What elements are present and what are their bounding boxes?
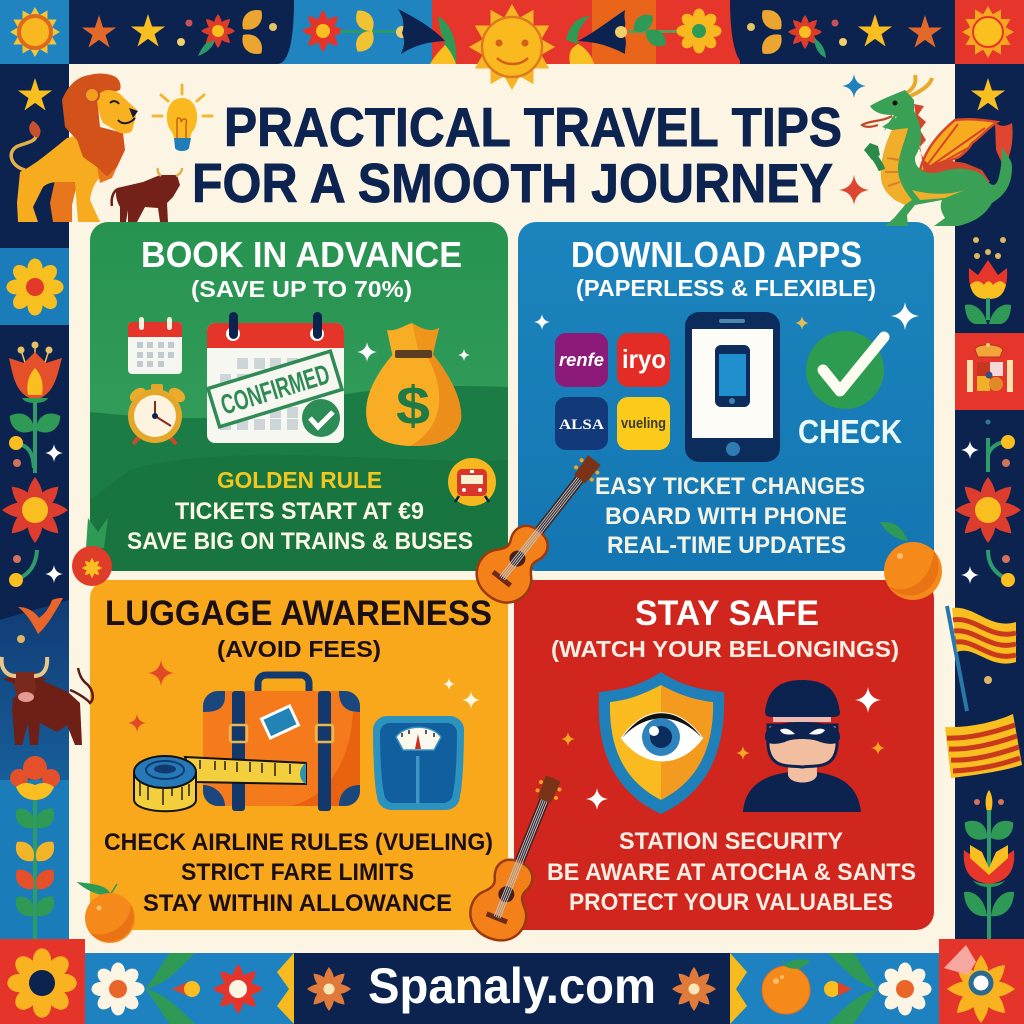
icon: train badge xyxy=(448,458,496,506)
tip text: ticket changes: EASY TICKET CHANGES xyxy=(595,473,865,500)
icon: orange fruit in band xyxy=(762,960,810,1014)
tip text: atocha and sants: BE AWARE AT ATOCHA & SANTS xyxy=(547,859,916,886)
app icon: vueling: vueling xyxy=(621,415,666,432)
icon: money bag: $ xyxy=(396,376,430,436)
icon: blue sparkle xyxy=(842,74,866,98)
panel: luggage awareness xyxy=(90,580,508,930)
subheading: watch belongings: (WATCH YOUR BELONGINGS) xyxy=(551,636,899,662)
tip text: board with phone: BOARD WITH PHONE xyxy=(605,503,847,530)
tip text: allowance: STAY WITHIN ALLOWANCE xyxy=(143,890,452,917)
label: check: CHECK xyxy=(798,413,902,450)
tip text: fare limits: STRICT FARE LIMITS xyxy=(181,859,414,886)
app icon: renfe xyxy=(555,333,608,387)
title line 1: PRACTICAL TRAVEL TIPS xyxy=(224,96,842,158)
icon: guitar on green and yellow panels xyxy=(466,443,617,613)
left decorative column xyxy=(0,64,69,944)
icon: red sparkle xyxy=(839,175,869,205)
icon: suitcase xyxy=(203,675,360,811)
subheading: avoid fees: (AVOID FEES) xyxy=(217,636,381,662)
coat of arms tile xyxy=(955,333,1024,410)
subheading: paperless: (PAPERLESS & FLEXIBLE) xyxy=(576,275,876,301)
panel: stay safe xyxy=(514,580,934,930)
icon: confirmed calendar xyxy=(207,312,344,443)
panel: download apps xyxy=(518,222,934,571)
tip text: tickets: TICKETS START AT €9 xyxy=(175,498,424,525)
sun with face xyxy=(469,0,568,90)
golden rule: GOLDEN RULE xyxy=(217,467,382,493)
tip text: updates: REAL-TIME UPDATES xyxy=(607,532,846,559)
icon: masked thief xyxy=(743,680,861,812)
app icon: renfe: renfe xyxy=(559,350,604,370)
bottom decorative band xyxy=(0,939,1024,1024)
subheading: save up to 70%: (SAVE UP TO 70%) xyxy=(191,276,412,302)
app icon: iryo xyxy=(617,333,670,387)
icon: bull on border xyxy=(2,657,93,745)
icon: small bull xyxy=(112,168,182,222)
icon: guitar bottom xyxy=(463,768,579,948)
app icon: alsa xyxy=(555,397,608,450)
app icon: iryo: iryo xyxy=(622,344,666,374)
title line 2: FOR A SMOOTH JOURNEY xyxy=(192,152,833,214)
icon: weighing scale xyxy=(373,716,464,810)
icon: lion xyxy=(11,74,138,222)
icon: sparkles yellow panel xyxy=(128,660,480,732)
tip text: save big: SAVE BIG ON TRAINS & BUSES xyxy=(127,528,473,555)
icon: dragon xyxy=(862,75,1013,226)
top decorative band xyxy=(0,0,1024,64)
tip text: station security: STATION SECURITY xyxy=(619,828,843,855)
icon: sparkles red panel xyxy=(561,687,885,810)
panel: book in advance xyxy=(90,222,508,571)
icon: green check xyxy=(806,331,884,409)
icon: orange top right xyxy=(880,522,942,600)
icon: small calendar xyxy=(128,317,182,374)
icon: alarm clock xyxy=(127,384,188,444)
icon: light bulb xyxy=(153,85,212,151)
heading: stay safe: STAY SAFE xyxy=(635,594,819,633)
icon: sparkles green panel xyxy=(357,342,470,362)
icon: measuring tape xyxy=(134,756,306,811)
heading: download apps: DOWNLOAD APPS xyxy=(571,234,862,275)
icon: sparkles blue panel xyxy=(534,302,919,330)
heading: book in advance: BOOK IN ADVANCE xyxy=(141,234,462,275)
heading: luggage awareness: LUGGAGE AWARENESS xyxy=(105,594,492,633)
icon: money bag xyxy=(366,323,461,446)
icon: orange bottom left xyxy=(79,883,135,943)
app icon: alsa: ALSA xyxy=(559,417,604,433)
right decorative column xyxy=(945,64,1024,944)
icon: phone xyxy=(685,312,780,462)
tip text: valuables: PROTECT YOUR VALUABLES xyxy=(569,889,893,916)
tip text: airline rules: CHECK AIRLINE RULES (VUELING) xyxy=(104,829,493,856)
icon: confirmed calendar: CONFIRMED xyxy=(217,358,333,421)
website name: Spanaly.com xyxy=(368,958,656,1014)
icon: pomegranate xyxy=(72,518,112,586)
app icon: vueling xyxy=(617,397,670,450)
icon: shield with eye xyxy=(599,672,724,814)
